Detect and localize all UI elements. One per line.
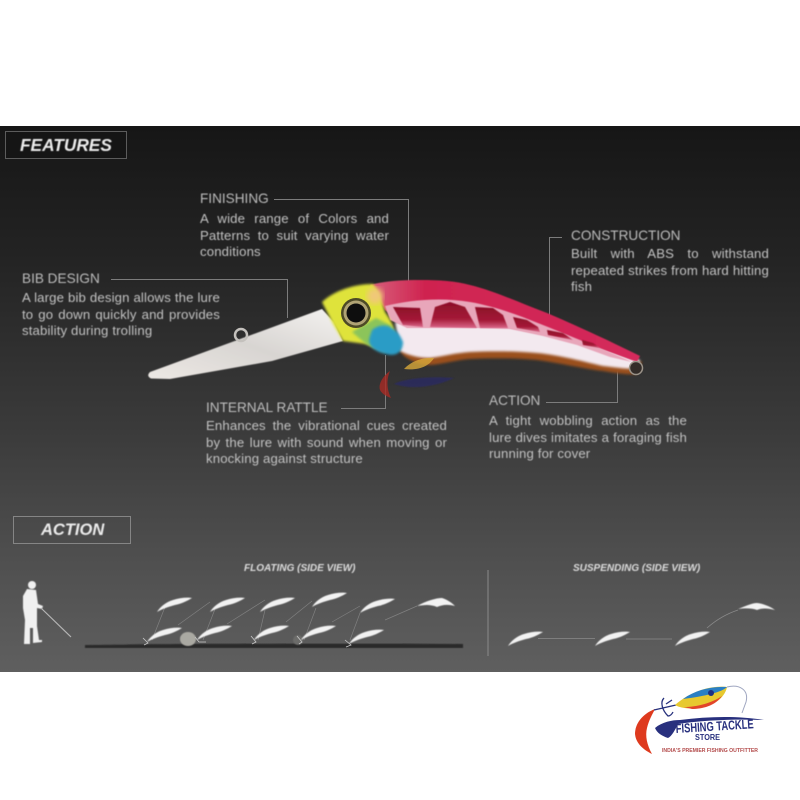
heading: FEATURES xyxy=(5,131,127,159)
callout: action: lure dives imitates a foraging fish xyxy=(489,430,687,445)
callout: action xyxy=(488,393,687,462)
callout: internal rattle: Enhances the vibrational cues created xyxy=(206,418,447,433)
spinner blade xyxy=(675,687,727,708)
callout: internal rattle: by the lure with sound when moving or xyxy=(206,435,447,450)
callout: finishing: conditions xyxy=(200,244,261,259)
callout: action: A tight wobbling action as the xyxy=(489,413,687,428)
heading: FEATURES: FEATURES xyxy=(20,135,112,155)
bib xyxy=(148,309,343,379)
callout: bib design xyxy=(22,271,220,338)
callout: action: ACTION xyxy=(489,393,540,408)
callout: finishing: FINISHING xyxy=(200,191,269,206)
eye xyxy=(341,298,371,328)
ground xyxy=(85,644,463,648)
body orange underside xyxy=(395,335,642,374)
floating lures xyxy=(147,593,455,644)
logo name: FISHING TACKLE xyxy=(675,716,754,736)
tagline: INDIA'S PREMIER FISHING OUTFITTER xyxy=(662,748,758,754)
connecting dive lines xyxy=(152,600,417,640)
panel: dark gradient background xyxy=(0,126,800,672)
label: floating side view: FLOATING (SIDE VIEW) xyxy=(244,563,355,574)
callout: bib design: stability during trolling xyxy=(22,323,152,338)
label: suspending side view: SUSPENDING (SIDE VIEW) xyxy=(573,563,700,574)
callout: construction: repeated strikes from hard hitting xyxy=(571,263,769,278)
callout: action: running for cover xyxy=(489,446,590,461)
callout: bib design: to go down quickly and provides xyxy=(22,307,220,322)
heading: ACTION xyxy=(13,516,131,544)
callout: internal rattle: knocking against structure xyxy=(206,451,363,466)
blue cheek xyxy=(369,326,403,355)
head yellow xyxy=(322,284,395,352)
red tail xyxy=(635,709,655,754)
rocks xyxy=(180,632,303,646)
logo: Fishing Tackle Store: STORE xyxy=(695,733,721,742)
callout: bib design: A large bib design allows the lure xyxy=(22,290,220,305)
body belly white xyxy=(395,322,640,369)
tail hook eye xyxy=(630,362,642,374)
callout: finishing: A wide range of Colors and xyxy=(200,211,389,226)
callout: construction: fish xyxy=(571,279,592,294)
scale windows xyxy=(393,302,600,348)
callout: finishing xyxy=(200,191,390,259)
head green xyxy=(352,318,392,348)
fish swoosh xyxy=(655,717,764,738)
heading: ACTION: ACTION xyxy=(41,521,104,539)
callout: construction xyxy=(570,228,769,294)
callout: construction: CONSTRUCTION xyxy=(571,228,681,243)
tail hooks xyxy=(143,636,351,647)
orange cheek xyxy=(367,288,383,304)
callout: bib design: BIB DESIGN xyxy=(22,271,100,286)
callout: internal rattle: INTERNAL RATTLE xyxy=(206,400,328,415)
pale vein band xyxy=(385,299,632,362)
body red back xyxy=(370,280,640,362)
ring xyxy=(235,329,247,341)
callout: finishing: Patterns to suit varying water xyxy=(200,228,389,243)
hook xyxy=(654,698,676,716)
callout: internal rattle xyxy=(206,400,448,466)
callout: construction: Built with ABS to withstand xyxy=(571,246,769,261)
